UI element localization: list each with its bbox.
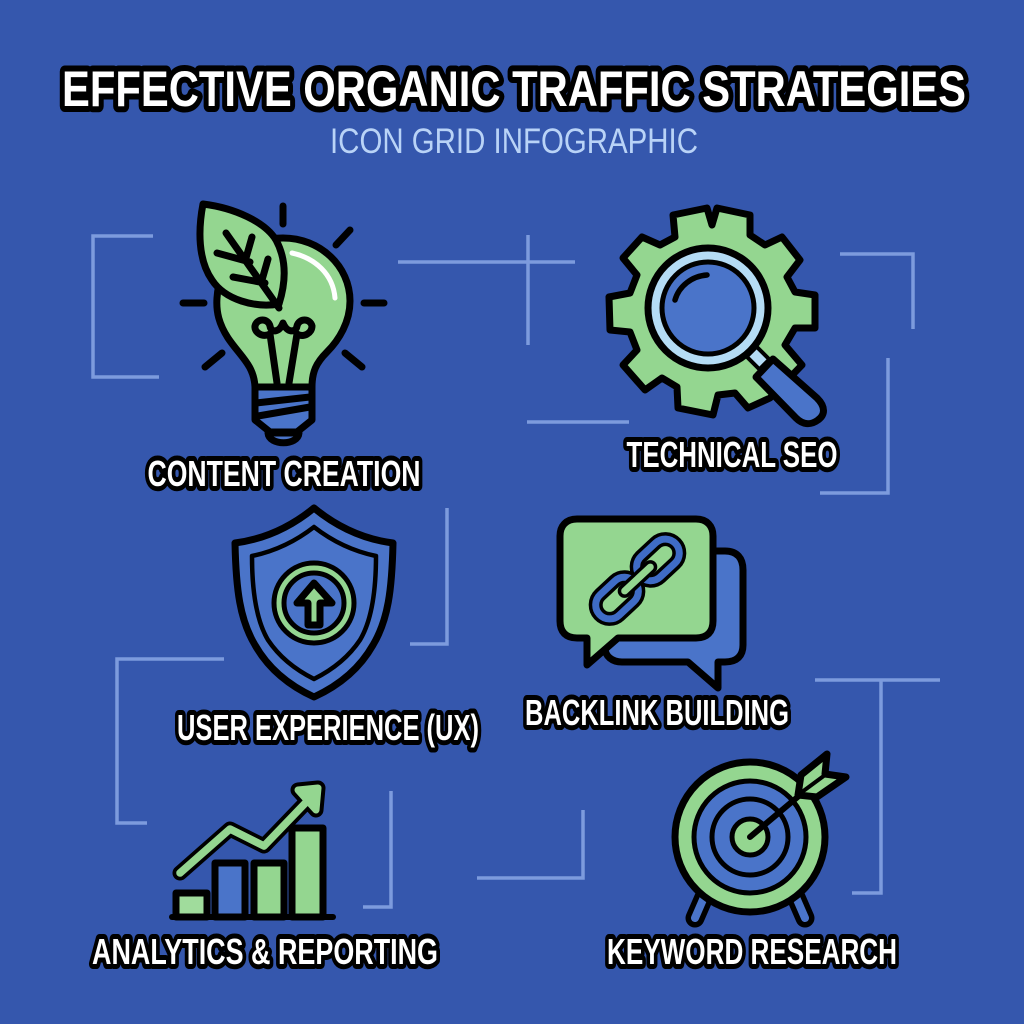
icon: bar chart with arrow bbox=[172, 788, 333, 917]
label: keyword research: KEYWORD RESEARCH bbox=[607, 931, 897, 972]
label: technical seo: TECHNICAL SEO bbox=[626, 434, 838, 475]
icon: chat bubbles with chain bbox=[560, 519, 743, 688]
icon: target with arrow bbox=[675, 754, 846, 918]
icon: light bulb with leaf bbox=[183, 204, 384, 443]
label: backlink building: BACKLINK BUILDING bbox=[525, 692, 789, 733]
label: user experience: USER EXPERIENCE (UX) bbox=[177, 707, 479, 748]
label: analytics and reporting: ANALYTICS & REPORTING bbox=[92, 931, 438, 972]
icon: shield with up arrow bbox=[235, 508, 393, 697]
icon: gear with magnifier bbox=[609, 208, 824, 424]
subtitle: ICON GRID INFOGRAPHIC bbox=[330, 122, 698, 161]
label: content creation: CONTENT CREATION bbox=[148, 453, 420, 494]
